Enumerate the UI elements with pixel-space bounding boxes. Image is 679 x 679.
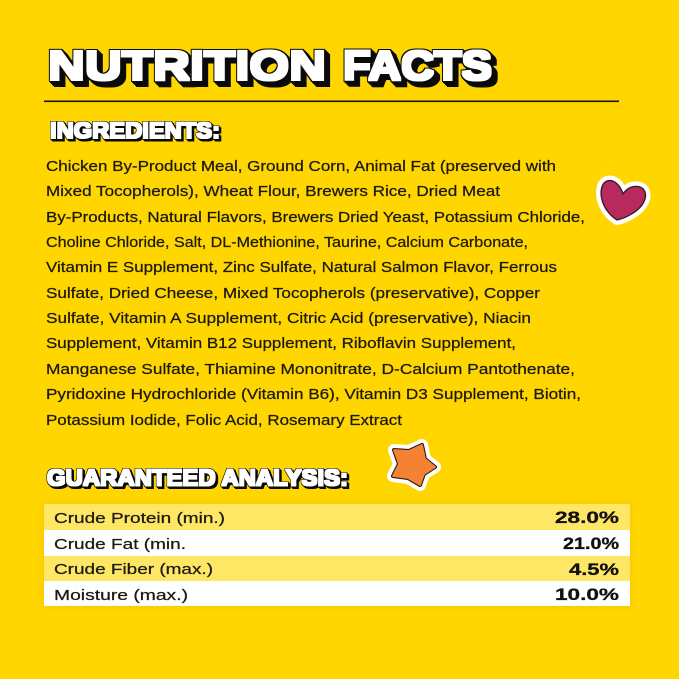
row: crude fiber [44,556,630,581]
title: NUTRITION [48,42,326,88]
ingredients text block: By-Products, Natural Flavors, Brewers Dried Yeast, Potassium Chloride, [46,209,585,226]
title rule [44,100,619,102]
icon: heart [601,181,646,220]
ingredients text block: Chicken By-Product Meal, Ground Corn, Animal Fat (preserved with [46,158,556,175]
row: crude protein: Crude Protein (min.) [54,510,225,527]
row: crude protein [44,504,630,530]
ingredients text block: Pyridoxine Hydrochloride (Vitamin B6), Vitamin D3 Supplement, Biotin, [46,386,581,403]
heading: ingredients: INGREDIENTS: [50,118,220,143]
ingredients text block: Supplement, Vitamin B12 Supplement, Riboflavin Supplement, [46,335,516,352]
ingredients text block: Potassium Iodide, Folic Acid, Rosemary Extract [46,412,403,429]
table shadow [44,504,630,606]
table: guaranteed analysis [44,504,630,606]
ingredients text block: Sulfate, Dried Cheese, Mixed Tocopherols (preservative), Copper [46,285,540,302]
row: crude fat [44,530,630,556]
ingredients text block: Vitamin E Supplement, Zinc Sulfate, Natural Salmon Flavor, Ferrous [46,259,557,276]
row: crude fat: 21.0% [563,534,619,553]
row: crude fiber: Crude Fiber (max.) [54,561,213,578]
ingredients text block [46,158,585,429]
row: moisture: Moisture (max.) [54,587,188,604]
ingredients text block: Mixed Tocopherols), Wheat Flour, Brewers Rice, Dried Meat [46,183,501,200]
heading: guaranteed analysis: GUARANTEED ANALYSIS: [47,464,348,490]
ingredients text block: Sulfate, Vitamin A Supplement, Citric Acid (preservative), Niacin [46,310,531,327]
title: FACTS [343,42,492,88]
title [48,42,492,88]
icon: star [393,445,435,485]
row: crude protein: 28.0% [555,508,619,527]
row: crude fiber: 4.5% [569,560,619,579]
row: moisture: 10.0% [555,585,619,604]
row: crude fat: Crude Fat (min. [54,536,186,553]
ingredients text block: Choline Chloride, Salt, DL-Methionine, Taurine, Calcium Carbonate, [46,234,528,251]
row: moisture [44,581,630,606]
ingredients text block: Manganese Sulfate, Thiamine Mononitrate, D-Calcium Pantothenate, [46,361,575,378]
